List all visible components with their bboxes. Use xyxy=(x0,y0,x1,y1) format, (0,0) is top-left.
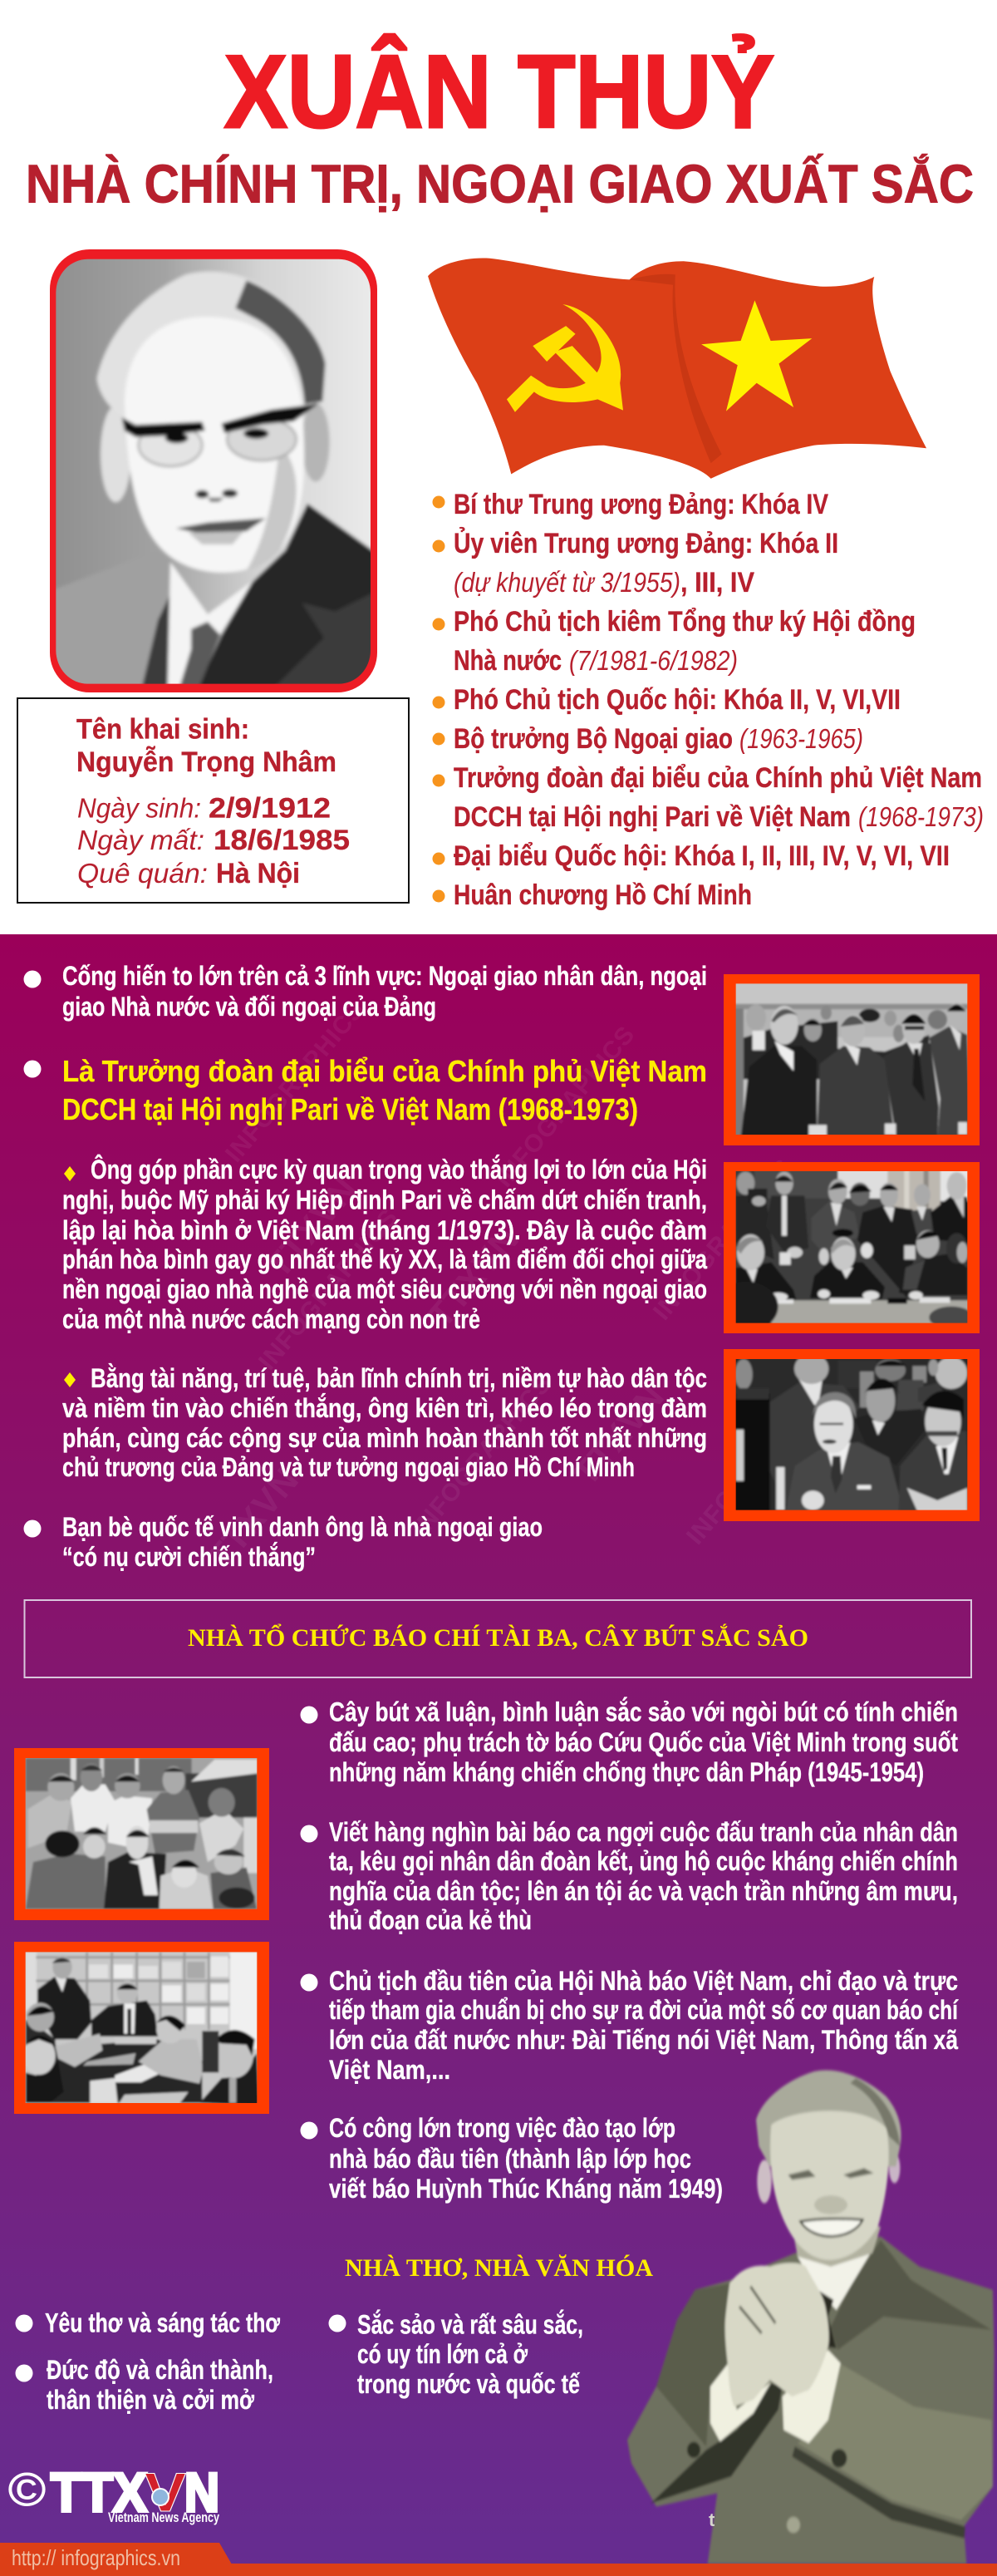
watermarks: INFOGRAPHICS xyxy=(490,1021,641,1192)
dark hair man xyxy=(871,1409,921,1421)
item: smile of victory xyxy=(23,1512,543,1572)
paragraph: talent xyxy=(62,1363,707,1482)
ears xyxy=(757,2160,772,2203)
face xyxy=(125,317,304,573)
TTXVN logo: N xyxy=(184,2461,219,2523)
collar xyxy=(798,2250,872,2310)
glasses brow xyxy=(122,417,205,437)
smiling portrait cut-out xyxy=(627,2071,995,2564)
item: first chairman: Việt Nam,... xyxy=(329,2055,450,2085)
paragraph: contribution xyxy=(62,1155,707,1334)
neck xyxy=(792,2227,881,2267)
party flag xyxy=(428,258,926,479)
dates and hometown: Hà Nội xyxy=(216,858,300,889)
smile xyxy=(800,2219,862,2236)
suit xyxy=(627,2237,995,2564)
item: love of poetry: Yêu thơ và sáng tác thơ xyxy=(45,2308,280,2337)
paragraph: contribution: nghị, buộc Mỹ phải ký Hiệp định Pari về chấm dứt chiến tranh, xyxy=(62,1185,707,1215)
item: smile of victory: Bạn bè quốc tế vinh danh ông là nhà ngoại giao xyxy=(62,1512,543,1542)
item: training journalists: Có công lớn trong việc đào tạo lớp xyxy=(329,2113,675,2143)
TTXVN logo: © xyxy=(8,2463,46,2515)
Paris conference section text xyxy=(23,961,707,1572)
icon: globe xyxy=(152,2489,169,2505)
photo: signing table xyxy=(715,1162,980,1333)
middle man xyxy=(817,1046,895,1137)
ears xyxy=(101,406,131,502)
career list xyxy=(432,489,984,911)
eyes xyxy=(788,2170,816,2180)
stray letter on suit: t xyxy=(709,2510,715,2530)
paragraph: talent: và niềm tin vào chiến thắng, ông kiên trì, khéo léo trong đàm xyxy=(62,1393,707,1423)
item: first chairman xyxy=(301,1966,959,2085)
hands xyxy=(725,2263,829,2406)
paragraph: contribution: Ông góp phần cực kỳ quan trọng vào thắng lợi to lớn của Hội xyxy=(91,1155,707,1185)
right man xyxy=(199,2053,259,2106)
seated men xyxy=(736,1262,796,1301)
dates and hometown: 2/9/1912 xyxy=(209,793,331,825)
faces top right xyxy=(875,1359,906,1382)
career list: Bí thư Trung ương Đảng: Khóa IV xyxy=(454,489,828,520)
hands and watermark xyxy=(808,1125,827,1136)
buttons xyxy=(687,2442,700,2458)
TTXVN logo: TTX xyxy=(51,2461,147,2523)
icon: yellow star xyxy=(701,300,812,411)
item: prestige xyxy=(329,2309,583,2399)
watermarks: TTXVN xyxy=(258,1169,365,1285)
career list: Phó Chủ tịch Quốc hội: Khóa II, V, VI,VII xyxy=(454,684,901,716)
footer bar: http:// infographics.vn xyxy=(12,2545,180,2570)
biography box xyxy=(17,698,409,903)
career list: , III, IV xyxy=(680,567,754,598)
paragraph: talent: Bằng tài năng, trí tuệ, bản lĩnh chính trị, niềm tự hào dân tộc xyxy=(91,1363,707,1393)
item: training journalists: viết báo Huỳnh Thúc Kháng năm 1949) xyxy=(329,2174,723,2204)
paragraph: contribution: nền ngoại giao nhà nghề của một siêu cường với nền ngoại giao xyxy=(62,1274,707,1304)
tie xyxy=(815,2288,837,2348)
paragraph: contribution: lập lại hòa bình ở Việt Nam (tháng 1/1973). Đây là cuộc đàm xyxy=(62,1215,707,1245)
item: sharp pen xyxy=(301,1697,958,1787)
mouth xyxy=(176,518,266,533)
purple background panel xyxy=(0,934,997,2576)
highlighted heading: Là Trưởng đoàn đại biểu của Chính phủ Việt Nam xyxy=(62,1054,707,1088)
poet section heading: NHÀ THƠ, NHÀ VĂN HÓA xyxy=(345,2254,653,2282)
item: thousands of articles: thủ đoạn của kẻ thù xyxy=(329,1905,532,1935)
table xyxy=(50,2039,202,2103)
footer bar xyxy=(0,2543,997,2576)
main man xyxy=(785,1442,904,1513)
back row xyxy=(27,1795,72,1848)
item: prestige: có uy tín lớn cả ở xyxy=(357,2339,528,2369)
journalism list xyxy=(301,1697,959,2204)
photo: office with bookshelves xyxy=(14,1942,269,2114)
paragraph: contribution: của một nhà nước cách mạng còn non trẻ xyxy=(62,1304,480,1334)
item: virtue: Đức độ và chân thành, xyxy=(47,2355,273,2385)
item: training journalists xyxy=(301,2113,723,2204)
portrait photo with red frame xyxy=(50,249,377,692)
watermarks xyxy=(200,996,832,1576)
biography box: Nguyễn Trọng Nhâm xyxy=(76,746,336,778)
highlighted heading: DCCH tại Hội nghị Pari về Việt Nam (1968-1973) xyxy=(62,1092,638,1126)
watermarks: TTXVN xyxy=(200,1460,307,1576)
paragraph: contribution: phán hòa bình gay go nhất thế kỷ XX, là tâm điểm đối chọi giữa xyxy=(62,1244,707,1274)
woman xyxy=(139,2039,204,2084)
paragraph: talent: phán, cùng các cộng sự của mình hoàn thành tốt nhất những xyxy=(62,1423,707,1453)
dates and hometown: Ngày mất: xyxy=(77,825,204,855)
item: three fields: giao Nhà nước và đối ngoại của Đảng xyxy=(62,992,436,1022)
career list: Phó Chủ tịch kiêm Tổng thư ký Hội đồng xyxy=(454,606,916,638)
right man xyxy=(899,1431,970,1513)
dates and hometown xyxy=(77,793,350,889)
photo: journalists group xyxy=(14,1748,269,1920)
sleeve shadow xyxy=(651,2383,783,2503)
career list: Bộ trưởng Bộ Ngoại giao xyxy=(454,723,733,755)
far right man xyxy=(929,1027,970,1137)
watermarks: TTXVN xyxy=(566,1377,672,1493)
right jacket xyxy=(197,504,376,690)
back row xyxy=(744,1021,929,1079)
standing man xyxy=(37,1977,91,2039)
TTXVN logo: V xyxy=(145,2461,186,2523)
item: smile of victory: “có nụ cười chiến thắng” xyxy=(62,1542,316,1572)
nose xyxy=(195,490,209,498)
career list: (1963-1965) xyxy=(739,723,863,754)
item: thousands of articles xyxy=(301,1817,958,1935)
poet list xyxy=(15,2308,583,2415)
icon: hammer and sickle xyxy=(507,304,623,412)
watermarks: INFOGRAPHICS xyxy=(648,1154,798,1325)
left men xyxy=(26,2020,56,2053)
item: virtue: thân thiện và cởi mở xyxy=(47,2385,254,2415)
right man xyxy=(883,1042,939,1137)
watermarks: TTXVN xyxy=(420,1219,527,1335)
item: training journalists: nhà báo đầu tiên (thành lập lớp học xyxy=(329,2144,691,2174)
highlighted heading xyxy=(23,1054,707,1126)
left jacket xyxy=(56,576,98,683)
career list: Nhà nước xyxy=(454,645,562,677)
journalism section heading box xyxy=(25,1600,971,1677)
standing men xyxy=(736,1195,774,1259)
face xyxy=(770,2111,889,2260)
watermarks: INFOGRAPHICS xyxy=(253,1204,404,1375)
career list: (dự khuyết từ 3/1955) xyxy=(454,567,680,598)
item: three fields xyxy=(23,961,707,1022)
watermarks: INFOGRAPHICS xyxy=(681,1378,832,1549)
tie xyxy=(179,622,220,690)
career list: Huân chương Hồ Chí Minh xyxy=(454,879,752,911)
watermarks: INFOGRAPHICS xyxy=(220,996,371,1167)
lenses xyxy=(139,424,202,466)
photo: delegation walking xyxy=(724,974,980,1145)
title xyxy=(26,34,974,214)
shirt xyxy=(168,562,255,690)
hair xyxy=(95,270,288,415)
table xyxy=(771,1300,970,1325)
back man xyxy=(770,1382,860,1505)
eyes xyxy=(165,433,189,443)
career list: (7/1981-6/1982) xyxy=(569,645,738,676)
item: prestige: Sắc sảo và rất sâu sắc, xyxy=(357,2309,583,2339)
center seated man xyxy=(91,2001,158,2037)
photo: smiling at the talks xyxy=(724,1349,980,1521)
dates and hometown: 18/6/1985 xyxy=(214,825,350,856)
career list: Ủy viên Trung ương Đảng: Khóa II xyxy=(454,528,838,559)
career list: DCCH tại Hội nghị Pari về Việt Nam xyxy=(454,801,851,833)
dates and hometown: Ngày sinh: xyxy=(77,793,201,823)
left man xyxy=(741,1046,817,1137)
TTXVN logo: Vietnam News Agency xyxy=(108,2510,219,2525)
journalism section heading box: NHÀ TỔ CHỨC BÁO CHÍ TÀI BA, CÂY BÚT SẮC SẢO xyxy=(188,1623,808,1652)
shelves xyxy=(36,1952,230,2030)
front row xyxy=(26,1854,106,1909)
cuffs xyxy=(710,2363,771,2441)
hair xyxy=(756,2071,901,2166)
url tab xyxy=(0,2543,232,2564)
item: three fields: Cống hiến to lớn trên cả 3 lĩnh vực: Ngoại giao nhân dân, ngoại xyxy=(62,961,707,991)
item: virtue xyxy=(15,2355,273,2415)
dates and hometown: Quê quán: xyxy=(77,858,208,889)
watermarks: INFOGRAPHICS xyxy=(407,1370,557,1541)
paragraph: talent: chủ trương của Đảng và tư tưởng ngoại giao Hồ Chí Minh xyxy=(62,1452,635,1482)
birth name: Tên khai sinh: xyxy=(76,713,249,745)
item: prestige: trong nước và quốc tế xyxy=(357,2369,580,2399)
title: XUÂN THUỶ xyxy=(224,34,774,150)
TTXVN logo xyxy=(8,2461,219,2525)
